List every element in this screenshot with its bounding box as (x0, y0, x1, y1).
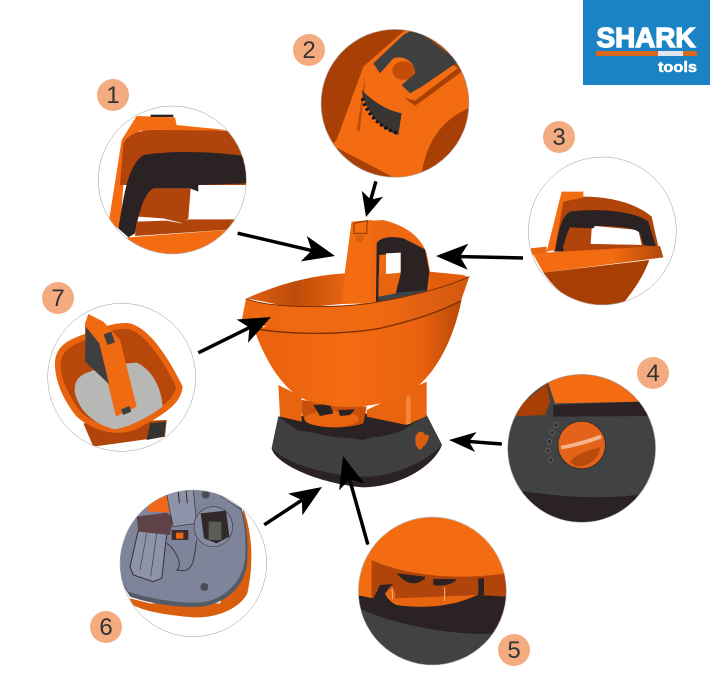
badge 6: 6 (99, 614, 113, 641)
badge 7: 7 (51, 285, 65, 312)
badge 5: 5 (507, 637, 521, 664)
product base (272, 413, 442, 487)
arrow to detail 1 (235, 221, 338, 269)
arrow to detail 5 (330, 452, 380, 548)
arrow to detail 4 (448, 430, 503, 454)
product legs and hub (278, 382, 427, 427)
arrow to detail 2 (355, 178, 386, 220)
detail 5: spreading disc (357, 517, 507, 670)
badge 5 (498, 634, 530, 666)
arrow to detail 6 (257, 476, 329, 536)
badge 3: 3 (552, 124, 566, 151)
arrow to detail 3 (436, 243, 523, 271)
detail 6: battery compartment underside (118, 487, 267, 637)
badge 7 (42, 282, 74, 314)
badge 3 (543, 121, 575, 153)
badge 1: 1 (106, 82, 120, 109)
badge 2: 2 (302, 37, 316, 64)
badge 4: 4 (646, 360, 660, 387)
main product: spreader (242, 220, 469, 487)
product handle (341, 220, 430, 304)
badge 2 (293, 34, 325, 66)
arrow to detail 7 (193, 305, 277, 364)
detail 7: inside of hopper (48, 303, 196, 451)
badge 4 (637, 357, 669, 389)
detail 2: handle top and dial (315, 27, 475, 180)
product bowl rim (242, 277, 469, 333)
logo: Shark Tools: SHARK (596, 22, 696, 53)
logo: Shark Tools (583, 0, 710, 85)
product bowl body (254, 299, 462, 407)
detail 3: handle side view (528, 157, 676, 308)
product bowl interior (247, 272, 468, 308)
badge 1 (97, 79, 129, 111)
detail 4: base dial (507, 373, 657, 527)
logo: Shark Tools: tools (658, 59, 697, 76)
detail 1: handle underside (98, 106, 248, 257)
badge 6 (90, 611, 122, 643)
